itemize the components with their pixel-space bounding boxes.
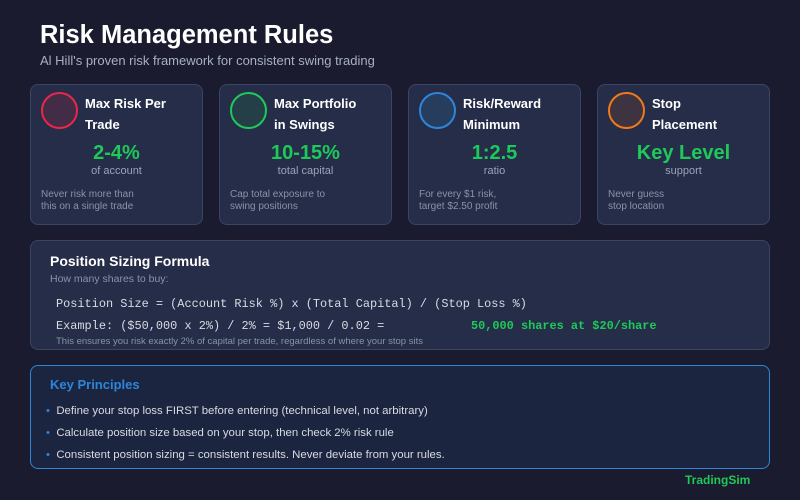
description: Never guess	[608, 189, 664, 200]
card title	[274, 96, 356, 132]
card: stop placement: support	[665, 165, 702, 177]
value: Key Level	[637, 142, 730, 164]
description: swing positions	[230, 201, 298, 212]
icon: blue circle	[419, 92, 456, 129]
description	[41, 189, 134, 212]
bullet list: • Calculate position size based on your stop, then check 2% risk rule	[46, 427, 394, 439]
card title: Trade	[85, 117, 120, 132]
description: stop location	[608, 201, 664, 212]
value: 1:2.5	[472, 142, 517, 164]
card: max risk per trade	[30, 84, 203, 225]
subtitle: Al Hill's proven risk framework for consistent swing trading	[40, 53, 375, 68]
example result: 50,000 shares at $20/share	[471, 319, 657, 333]
bullet list	[46, 405, 445, 461]
description: target $2.50 profit	[419, 201, 497, 212]
description	[230, 189, 325, 212]
card: max portfolio: total capital	[278, 165, 333, 177]
card: max risk per trade: of account	[91, 165, 142, 177]
panel: key principles	[30, 365, 770, 469]
card title: Max Portfolio	[274, 96, 356, 111]
heading: Position Sizing Formula	[50, 253, 209, 269]
panel: position sizing formula	[30, 240, 770, 350]
description: For every $1 risk,	[419, 189, 496, 200]
card: risk reward: ratio	[484, 165, 505, 177]
icon: red circle	[41, 92, 78, 129]
value: 2-4%	[93, 142, 140, 164]
card title	[463, 96, 541, 132]
card title	[652, 96, 717, 132]
card title	[85, 96, 166, 132]
description	[419, 189, 498, 212]
card title: Max Risk Per	[85, 96, 166, 111]
heading: Key Principles	[50, 377, 140, 392]
card title: in Swings	[274, 117, 335, 132]
formula: Position Size = (Account Risk %) x (Total Capital) / (Stop Loss %)	[56, 297, 527, 311]
brand logo: TradingSim	[685, 473, 750, 487]
subheading: How many shares to buy:	[50, 273, 168, 285]
note: This ensures you risk exactly 2% of capital per trade, regardless of where your stop sits	[56, 336, 423, 347]
description: this on a single trade	[41, 201, 133, 212]
title: Risk Management Rules	[40, 21, 333, 49]
card title: Minimum	[463, 117, 520, 132]
card title: Stop	[652, 96, 681, 111]
icon: green circle	[230, 92, 267, 129]
example: Example: ($50,000 x 2%) / 2% = $1,000 / 0.02 =	[56, 319, 384, 333]
card title: Risk/Reward	[463, 96, 541, 111]
icon: orange circle	[608, 92, 645, 129]
description	[608, 189, 664, 212]
bullet list: • Consistent position sizing = consistent results. Never deviate from your rules.	[46, 449, 445, 461]
card: stop placement	[597, 84, 770, 225]
card: risk reward	[408, 84, 581, 225]
card title: Placement	[652, 117, 717, 132]
card: max portfolio	[219, 84, 392, 225]
bullet list: • Define your stop loss FIRST before entering (technical level, not arbitrary)	[46, 405, 428, 417]
description: Never risk more than	[41, 189, 134, 200]
value: 10-15%	[271, 142, 340, 164]
description: Cap total exposure to	[230, 189, 325, 200]
